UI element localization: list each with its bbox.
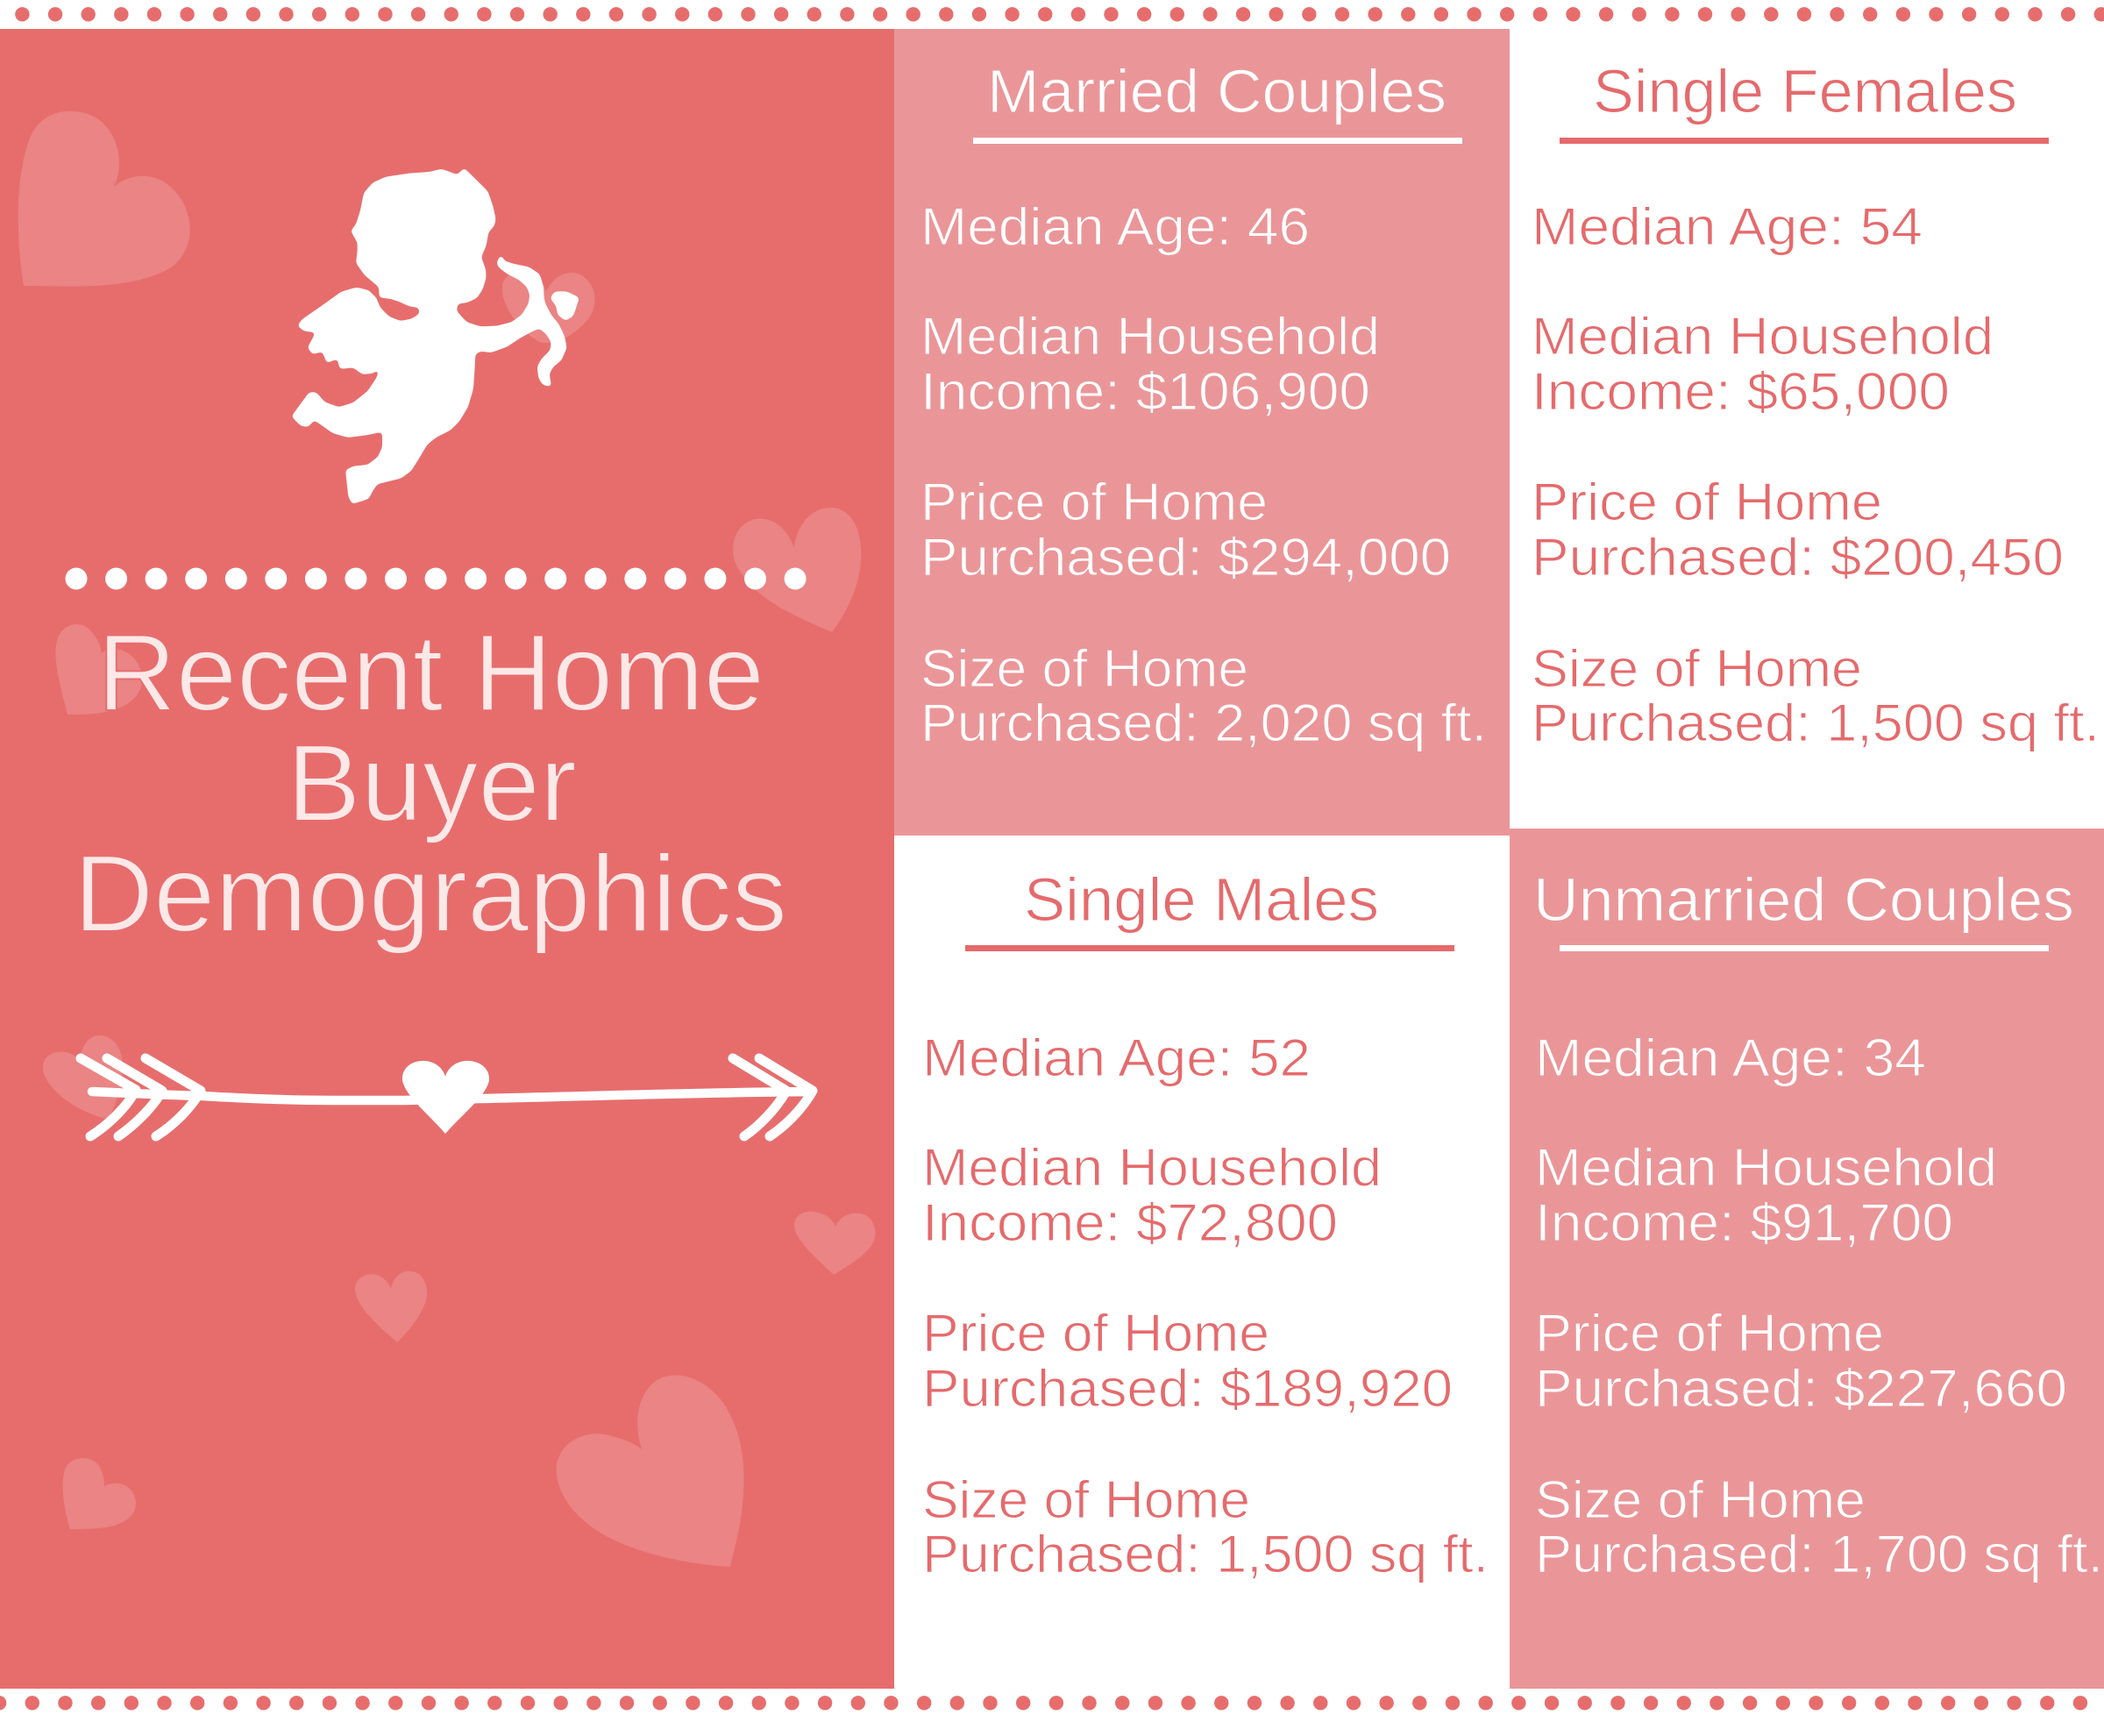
panel: Married Couples (894, 29, 1510, 836)
top dotted border (22, 7, 2104, 21)
title: Recent Home (97, 613, 764, 734)
heading: Single Males: Single Males (1024, 865, 1379, 934)
stats: Median Age: 54 (1532, 197, 1923, 256)
stats: Price of Home (1532, 473, 1882, 531)
stats (920, 197, 1487, 752)
stats: Price of Home (922, 1304, 1269, 1362)
stats: Size of Home (1532, 639, 1862, 698)
title (74, 613, 787, 955)
icon: arrow with heart (81, 1058, 813, 1136)
panel: title column (0, 29, 894, 1689)
stats: Purchased: $200,450 (1532, 528, 2064, 587)
stats: Median Household (922, 1138, 1382, 1197)
panel: Single Males (894, 836, 1510, 1689)
heading rule (965, 945, 1454, 951)
heading: Unmarried Couples: Unmarried Couples (1533, 865, 2074, 934)
stats: Size of Home (920, 639, 1248, 698)
stats: Purchased: $227,660 (1535, 1359, 2067, 1418)
stats: Median Age: 52 (922, 1028, 1311, 1087)
stats: Median Household (1532, 307, 1994, 366)
stats: Median Household (920, 307, 1380, 366)
heading: Married Couples: Married Couples (987, 57, 1446, 125)
title: Buyer (287, 723, 577, 844)
stats: Income: $65,000 (1532, 362, 1950, 421)
stats (922, 1028, 1489, 1583)
stats: Purchased: 1,500 sq ft. (922, 1525, 1489, 1583)
decorative hearts (18, 111, 875, 1567)
stats: Median Age: 46 (920, 197, 1310, 256)
stats: Price of Home (920, 473, 1268, 531)
stats (1535, 1028, 2103, 1583)
stats: Income: $72,800 (922, 1193, 1338, 1252)
stats: Size of Home (922, 1470, 1250, 1529)
panel: Unmarried Couples (1510, 829, 2104, 1689)
bottom dotted border (0, 1696, 2086, 1711)
stats: Purchased: 2,020 sq ft. (920, 694, 1487, 752)
icon: cupid silhouette (291, 167, 579, 504)
stats: Purchased: $294,000 (920, 528, 1451, 587)
stats: Median Household (1535, 1138, 1997, 1197)
heading rule (1560, 945, 2049, 951)
stats: Size of Home (1535, 1470, 1866, 1529)
panel: Single Females (1510, 29, 2104, 829)
heading rule (1560, 138, 2049, 144)
stats: Purchased: $189,920 (922, 1359, 1453, 1418)
stats: Median Age: 34 (1535, 1028, 1926, 1087)
heading rule (973, 138, 1462, 144)
title: Demographics (74, 834, 787, 955)
stats: Price of Home (1535, 1304, 1884, 1362)
stats: Purchased: 1,700 sq ft. (1535, 1525, 2103, 1583)
stats (1532, 197, 2100, 752)
stats: Income: $91,700 (1535, 1193, 1953, 1252)
heading: Single Females: Single Females (1593, 57, 2017, 125)
dotted divider (76, 568, 796, 589)
stats: Purchased: 1,500 sq ft. (1532, 694, 2100, 752)
stats: Income: $106,900 (920, 362, 1370, 421)
